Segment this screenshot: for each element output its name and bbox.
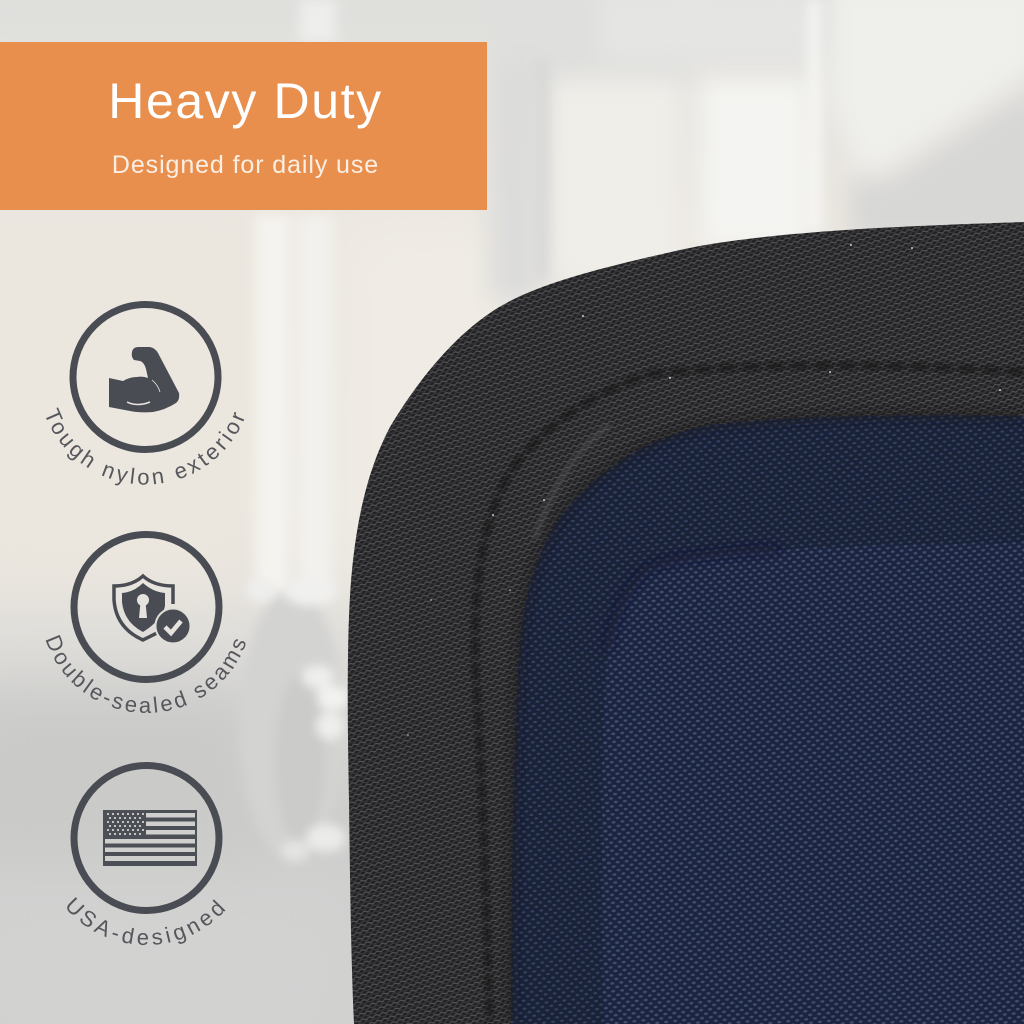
badge: double-sealed seams [46, 531, 246, 713]
fabric speckles [407, 244, 1001, 736]
icon: American flag [103, 810, 197, 866]
curved label: Tough nylon exterior [46, 407, 244, 486]
fold highlight [535, 425, 610, 540]
subheading: Designed for daily use [112, 151, 379, 179]
heading: Heavy Duty [108, 73, 383, 129]
bag: black nylon edge [348, 222, 1024, 1024]
header banner [0, 42, 487, 210]
curved label: Double-sealed seams [46, 634, 246, 713]
badge: USA-designed [67, 762, 226, 946]
bag: navy inner panel [511, 415, 1024, 1024]
seam stitch line [475, 366, 1024, 1024]
icon: shield with keyhole and check [114, 576, 190, 644]
badge: tough nylon exterior [46, 301, 244, 486]
curved label: USA-designed [67, 897, 226, 946]
raised lighter navy panel [602, 543, 1024, 1024]
icon: flexed arm [109, 347, 179, 412]
